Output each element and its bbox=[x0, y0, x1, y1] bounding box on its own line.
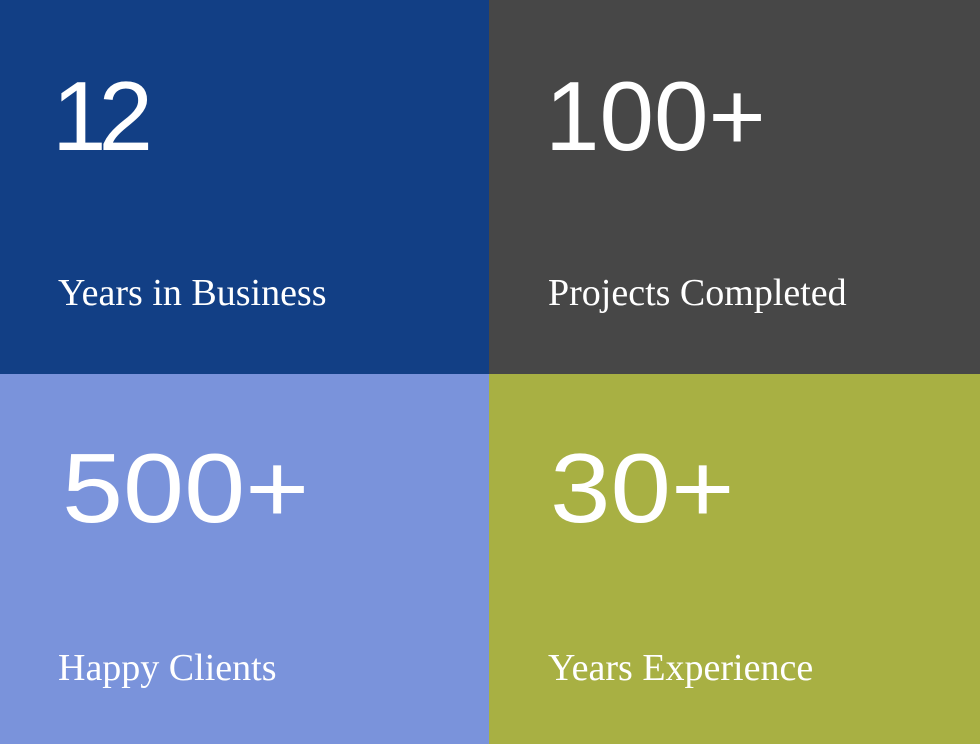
panel: happy clients bbox=[0, 374, 489, 744]
panel: projects completed bbox=[489, 0, 980, 374]
label: Happy Clients: Happy Clients bbox=[58, 647, 276, 689]
number: 100+: 100+ bbox=[545, 61, 766, 171]
number: 30+: 30+ bbox=[550, 433, 735, 543]
panel: years in business bbox=[0, 0, 489, 374]
label: Years in Business: Years in Business bbox=[58, 272, 327, 314]
panel: years experience bbox=[489, 374, 980, 744]
label: Years Experience: Years Experience bbox=[548, 647, 813, 689]
number: 500+: 500+ bbox=[62, 433, 309, 543]
number: 12: 12 bbox=[52, 61, 145, 171]
label: Projects Completed: Projects Completed bbox=[548, 272, 847, 314]
